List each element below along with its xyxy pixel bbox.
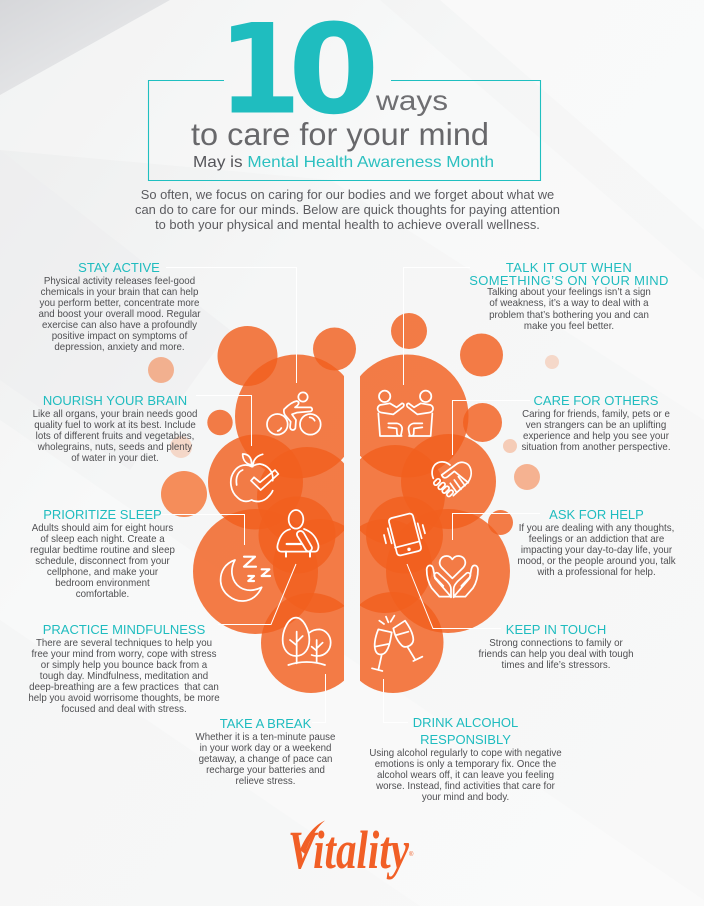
body text: If you are dealing with any thoughts, (519, 522, 674, 534)
body text: bedroom environment (55, 578, 150, 589)
body text: recharge your batteries and (206, 765, 325, 776)
body text (38, 276, 201, 353)
body text (487, 287, 651, 332)
body text: tough day. Mindfulness, meditation and (40, 671, 208, 682)
heading: TALK IT OUT WHEN (506, 260, 632, 275)
body text: cellphone, and make your (47, 567, 158, 578)
body text: schedule, disconnect from your (35, 556, 170, 567)
heading (469, 260, 669, 288)
intro text: So often, we focus on caring for our bodies and we forget about what we (141, 186, 554, 202)
body text: situation from another perspective. (521, 442, 671, 453)
body text: Adults should aim for eight hours (32, 522, 173, 534)
body text: lots of different fruits and vegetables, (36, 431, 194, 442)
body text (517, 522, 676, 578)
body text (478, 638, 634, 671)
body text: with a professional for help. (537, 567, 656, 578)
heading: KEEP IN TOUCH (506, 622, 606, 637)
icon: clinking champagne glasses (372, 616, 422, 671)
icon: handshake heart (432, 462, 471, 497)
body text: of sleep each night. Create a (40, 534, 165, 545)
body text: impacting your day-to-day life, your (521, 545, 672, 556)
heading: PRACTICE MINDFULNESS (43, 622, 205, 637)
body text: friends can help you deal with tough (478, 649, 634, 660)
body text: in your work day or a weekend (200, 743, 331, 754)
body text: Like all organs, your brain needs good (33, 408, 197, 420)
body text: exercise can also have a profoundly (42, 320, 197, 331)
body text (30, 522, 175, 600)
panel: practice mindfulness (28, 622, 220, 715)
right brain lobes (360, 313, 513, 693)
icon: tree pair (283, 618, 331, 665)
icon: person with sling (277, 510, 318, 557)
body text: Talking about your feelings isn’t a sign (487, 287, 651, 298)
icon: sleeping moon (221, 557, 270, 601)
panel: keep in touch (478, 622, 634, 671)
panel: take a break (196, 716, 335, 787)
left brain lobes (193, 326, 367, 693)
line: May is Mental Health Awareness Month: May is Mental Health Awareness Month (193, 154, 494, 171)
body text (33, 408, 197, 464)
title frame (148, 80, 540, 180)
body text: Using alcohol regularly to cope with negative (369, 748, 562, 759)
intro text: to both your physical and mental health to achieve overall wellness. (155, 216, 540, 232)
body text: help you avoid worrisome thoughts, be more (28, 693, 220, 704)
line: to care for your mind: to care for your mind (191, 116, 489, 152)
body text: depression, anxiety and more. (54, 342, 185, 353)
title: 10 ways to care for your mind (148, 0, 542, 181)
icon: hands holding heart (427, 556, 478, 597)
body text: of water in your diet. (71, 453, 159, 464)
pale accent bubbles (148, 355, 559, 517)
big number 10: 1 (218, 0, 302, 142)
icon: cyclist (267, 392, 321, 435)
body text: quality fuel to work at its best. Include (34, 420, 196, 431)
icon: two people talking (378, 391, 433, 436)
body text: positive impact on symptoms of (52, 331, 187, 342)
heading: STAY ACTIVE (78, 260, 160, 275)
body text: alcohol wears off, it can leave you feeling (377, 770, 554, 781)
heading: ASK FOR HELP (549, 507, 644, 522)
body text: feelings or an addiction that are (529, 534, 664, 545)
body text: wholegrains, nuts, seeds and plenty (38, 442, 192, 453)
body text: mood, or the people around you, talk (517, 556, 676, 567)
brain illustration (148, 267, 559, 693)
body text (521, 408, 671, 453)
body text (369, 748, 562, 803)
body text: Caring for friends, family, pets or e (522, 408, 670, 420)
body text (28, 638, 220, 715)
panel: prioritize sleep (30, 507, 175, 600)
body text: and boost your overall mood. Regular (38, 309, 201, 320)
heading: SOMETHING’S ON YOUR MIND (469, 273, 669, 288)
word: ways: ways (375, 85, 448, 116)
panel: nourish your brain (33, 393, 197, 464)
heading: PRIORITIZE SLEEP (43, 507, 162, 522)
icon: apple with check (231, 454, 278, 501)
body text: of weakness, it’s a way to deal with a (489, 298, 649, 309)
body text: worse. Instead, find activities that care for (376, 781, 555, 792)
panel: care for others (521, 393, 671, 453)
body text: make you feel better. (524, 321, 614, 332)
body text: you perform better, concentrate more (40, 298, 199, 309)
heading: NOURISH YOUR BRAIN (43, 393, 187, 408)
body text: comfortable. (76, 589, 129, 600)
panel: ask for help (517, 507, 676, 578)
logo: Vitality: Vitality (288, 820, 410, 880)
body text: chemicals in your brain that can help (41, 287, 198, 298)
logo: Vitality: ® (409, 851, 414, 858)
body text: your mind and body. (422, 792, 509, 803)
body text: deep-breathing are a few practices that can (29, 682, 219, 693)
body text: problem that’s bothering you and can (489, 310, 649, 320)
heading (413, 715, 518, 746)
body text: There are several techniques to help you (36, 638, 212, 648)
heading: CARE FOR OTHERS (534, 393, 658, 408)
body text: regular bedtime routine and sleep (30, 545, 175, 556)
body text: relieve stress. (236, 776, 295, 787)
body text: Physical activity releases feel-good (44, 276, 195, 286)
panel: talk it out (469, 260, 669, 332)
body text: experience and help you see your (523, 431, 669, 442)
body text: ven strangers can be an uplifting (526, 420, 666, 431)
heading: DRINK ALCOHOL (413, 715, 518, 730)
body text: emotions is only a temporary fix. Once the (375, 759, 556, 770)
icon: vibrating phone (384, 514, 425, 555)
body text: free your mind from worry, cope with stress (31, 649, 217, 660)
panel: stay active (38, 260, 201, 353)
body text: Strong connections to family or (489, 638, 623, 648)
body text: Whether it is a ten-minute pause (196, 732, 335, 742)
heading: RESPONSIBLY (420, 732, 511, 746)
body text: focused and deal with stress. (61, 704, 187, 715)
body text: getaway, a change of pace can (199, 754, 332, 765)
icons (221, 391, 478, 671)
body text: times and life’s stressors. (502, 660, 610, 671)
body text (196, 732, 335, 787)
body text: or simply help you bounce back from a (41, 660, 207, 671)
intro text (135, 186, 560, 232)
intro text: can do to care for our minds. Below are quick thoughts for paying attention (135, 202, 560, 216)
big number 10: 0 (288, 0, 380, 142)
connector lines (160, 268, 540, 722)
panel: drink alcohol responsibly (369, 715, 562, 803)
heading: TAKE A BREAK (220, 716, 311, 731)
